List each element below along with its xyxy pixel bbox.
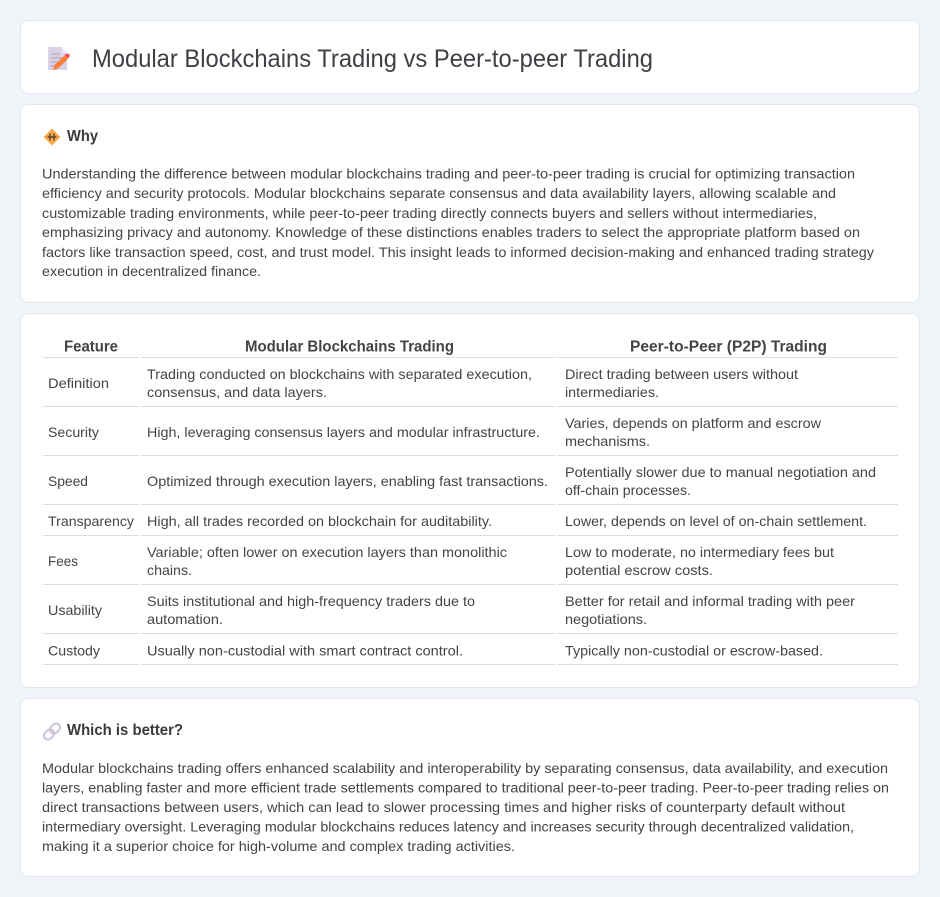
- text block: why paragraph: emphasizing privacy and autonomy. Knowledge of these distinctions enables traders to select the appropriate platform based on: [42, 224, 860, 240]
- panel: which is better: [20, 698, 920, 876]
- table header row: [64, 338, 827, 356]
- table row: speed: Potentially slower due to manual negotiation and: [565, 464, 876, 480]
- text block: which paragraph: Modular blockchains trading offers enhanced scalability and interoperability by separating consensus, data availability, and execution: [42, 760, 888, 776]
- table row: speed: [48, 464, 876, 498]
- text block: which paragraph: layers, enabling faster and more efficient trade settlements compared to traditional peer-to-peer trading. Peer-to-peer trading relies on: [42, 780, 889, 796]
- table row: definition: [48, 366, 798, 400]
- text block: why paragraph: factors like transaction speed, cost, and trust model. This insight leads to informed decision-making and enhanced trading strategy: [42, 244, 874, 260]
- table row: transparency: High, all trades recorded on blockchain for auditability.: [147, 513, 492, 529]
- table row: custody: Custody: [48, 642, 100, 658]
- table header row: Peer-to-Peer (P2P) Trading: [630, 338, 827, 356]
- table header row: Feature: [64, 338, 118, 356]
- table row: transparency: Transparency: [48, 513, 134, 529]
- text block: which paragraph: direct transactions between users, which can lead to slower processing times and higher risks of counterparty default without: [42, 799, 845, 815]
- table row: usability: automation.: [147, 611, 223, 627]
- table row: fees: chains.: [147, 562, 192, 578]
- table row: fees: Low to moderate, no intermediary fees but: [565, 544, 834, 560]
- panel: why: [20, 104, 920, 302]
- heading: why: Why: [67, 128, 98, 145]
- table row: usability: Better for retail and informal trading with peer: [565, 593, 855, 609]
- table row: usability: [48, 593, 855, 627]
- text block: why paragraph: customizable trading environments, while peer-to-peer trading directly connects buyers and sellers without intermediaries,: [42, 205, 817, 221]
- heading: which is better: Which is better?: [67, 722, 183, 739]
- table row: fees: potential escrow costs.: [565, 562, 713, 578]
- table row: definition: consensus, and data layers.: [147, 384, 327, 400]
- text block: which paragraph: intermediary oversight. Leveraging modular blockchains reduces latency and increases security through decentralized validation,: [42, 818, 854, 834]
- table row: usability: Suits institutional and high-frequency traders due to: [147, 593, 475, 609]
- table row: definition: Trading conducted on blockchains with separated execution,: [147, 366, 532, 382]
- icon: warning diamond: [44, 128, 60, 146]
- table row: fees: Fees: [48, 553, 78, 569]
- table row: fees: Variable; often lower on execution layers than monolithic: [147, 544, 507, 560]
- table row: speed: Optimized through execution layers, enabling fast transactions.: [147, 473, 548, 489]
- table row: security: High, leveraging consensus layers and modular infrastructure.: [147, 424, 540, 440]
- table row: definition: Direct trading between users without: [565, 366, 798, 382]
- table row: usability: Usability: [48, 602, 102, 618]
- table row: custody: Usually non-custodial with smart contract control.: [147, 642, 463, 658]
- table row: definition: intermediaries.: [565, 384, 659, 400]
- table row: fees: [48, 544, 834, 578]
- text block: which paragraph: [42, 760, 889, 854]
- text block: why paragraph: Understanding the difference between modular blockchains trading and peer-to-peer trading is crucial for optimizing transaction: [42, 166, 855, 182]
- text block: why paragraph: [42, 166, 874, 279]
- title: Modular Blockchains Trading vs Peer-to-peer Trading: [92, 45, 653, 73]
- table row: speed: Speed: [48, 473, 88, 489]
- table row: security: mechanisms.: [565, 433, 650, 449]
- table row: security: Varies, depends on platform and escrow: [565, 415, 822, 431]
- table row: security: Security: [48, 424, 99, 440]
- text block: which paragraph: making it a superior choice for high-volume and complex trading activities.: [42, 838, 515, 854]
- table header row: Modular Blockchains Trading: [245, 338, 454, 356]
- table row: transparency: [48, 513, 867, 529]
- table row: speed: off-chain processes.: [565, 482, 691, 498]
- table row: transparency: Lower, depends on level of on-chain settlement.: [565, 513, 867, 529]
- icon: document with pencil: [48, 47, 70, 70]
- text block: why paragraph: execution in decentralized finance.: [42, 263, 261, 279]
- icon: chain link: [42, 722, 62, 741]
- table row: usability: negotiations.: [565, 611, 647, 627]
- panel: comparison table: [20, 314, 920, 688]
- table row: security: [48, 415, 822, 449]
- panel: header: [20, 20, 920, 94]
- text block: why paragraph: efficiency and security protocols. Modular blockchains separate consensus and data availability layers, allowing scalable and: [42, 185, 836, 201]
- table row: custody: [48, 642, 823, 658]
- table row: custody: Typically non-custodial or escrow-based.: [565, 642, 823, 658]
- table row: definition: Definition: [48, 375, 109, 391]
